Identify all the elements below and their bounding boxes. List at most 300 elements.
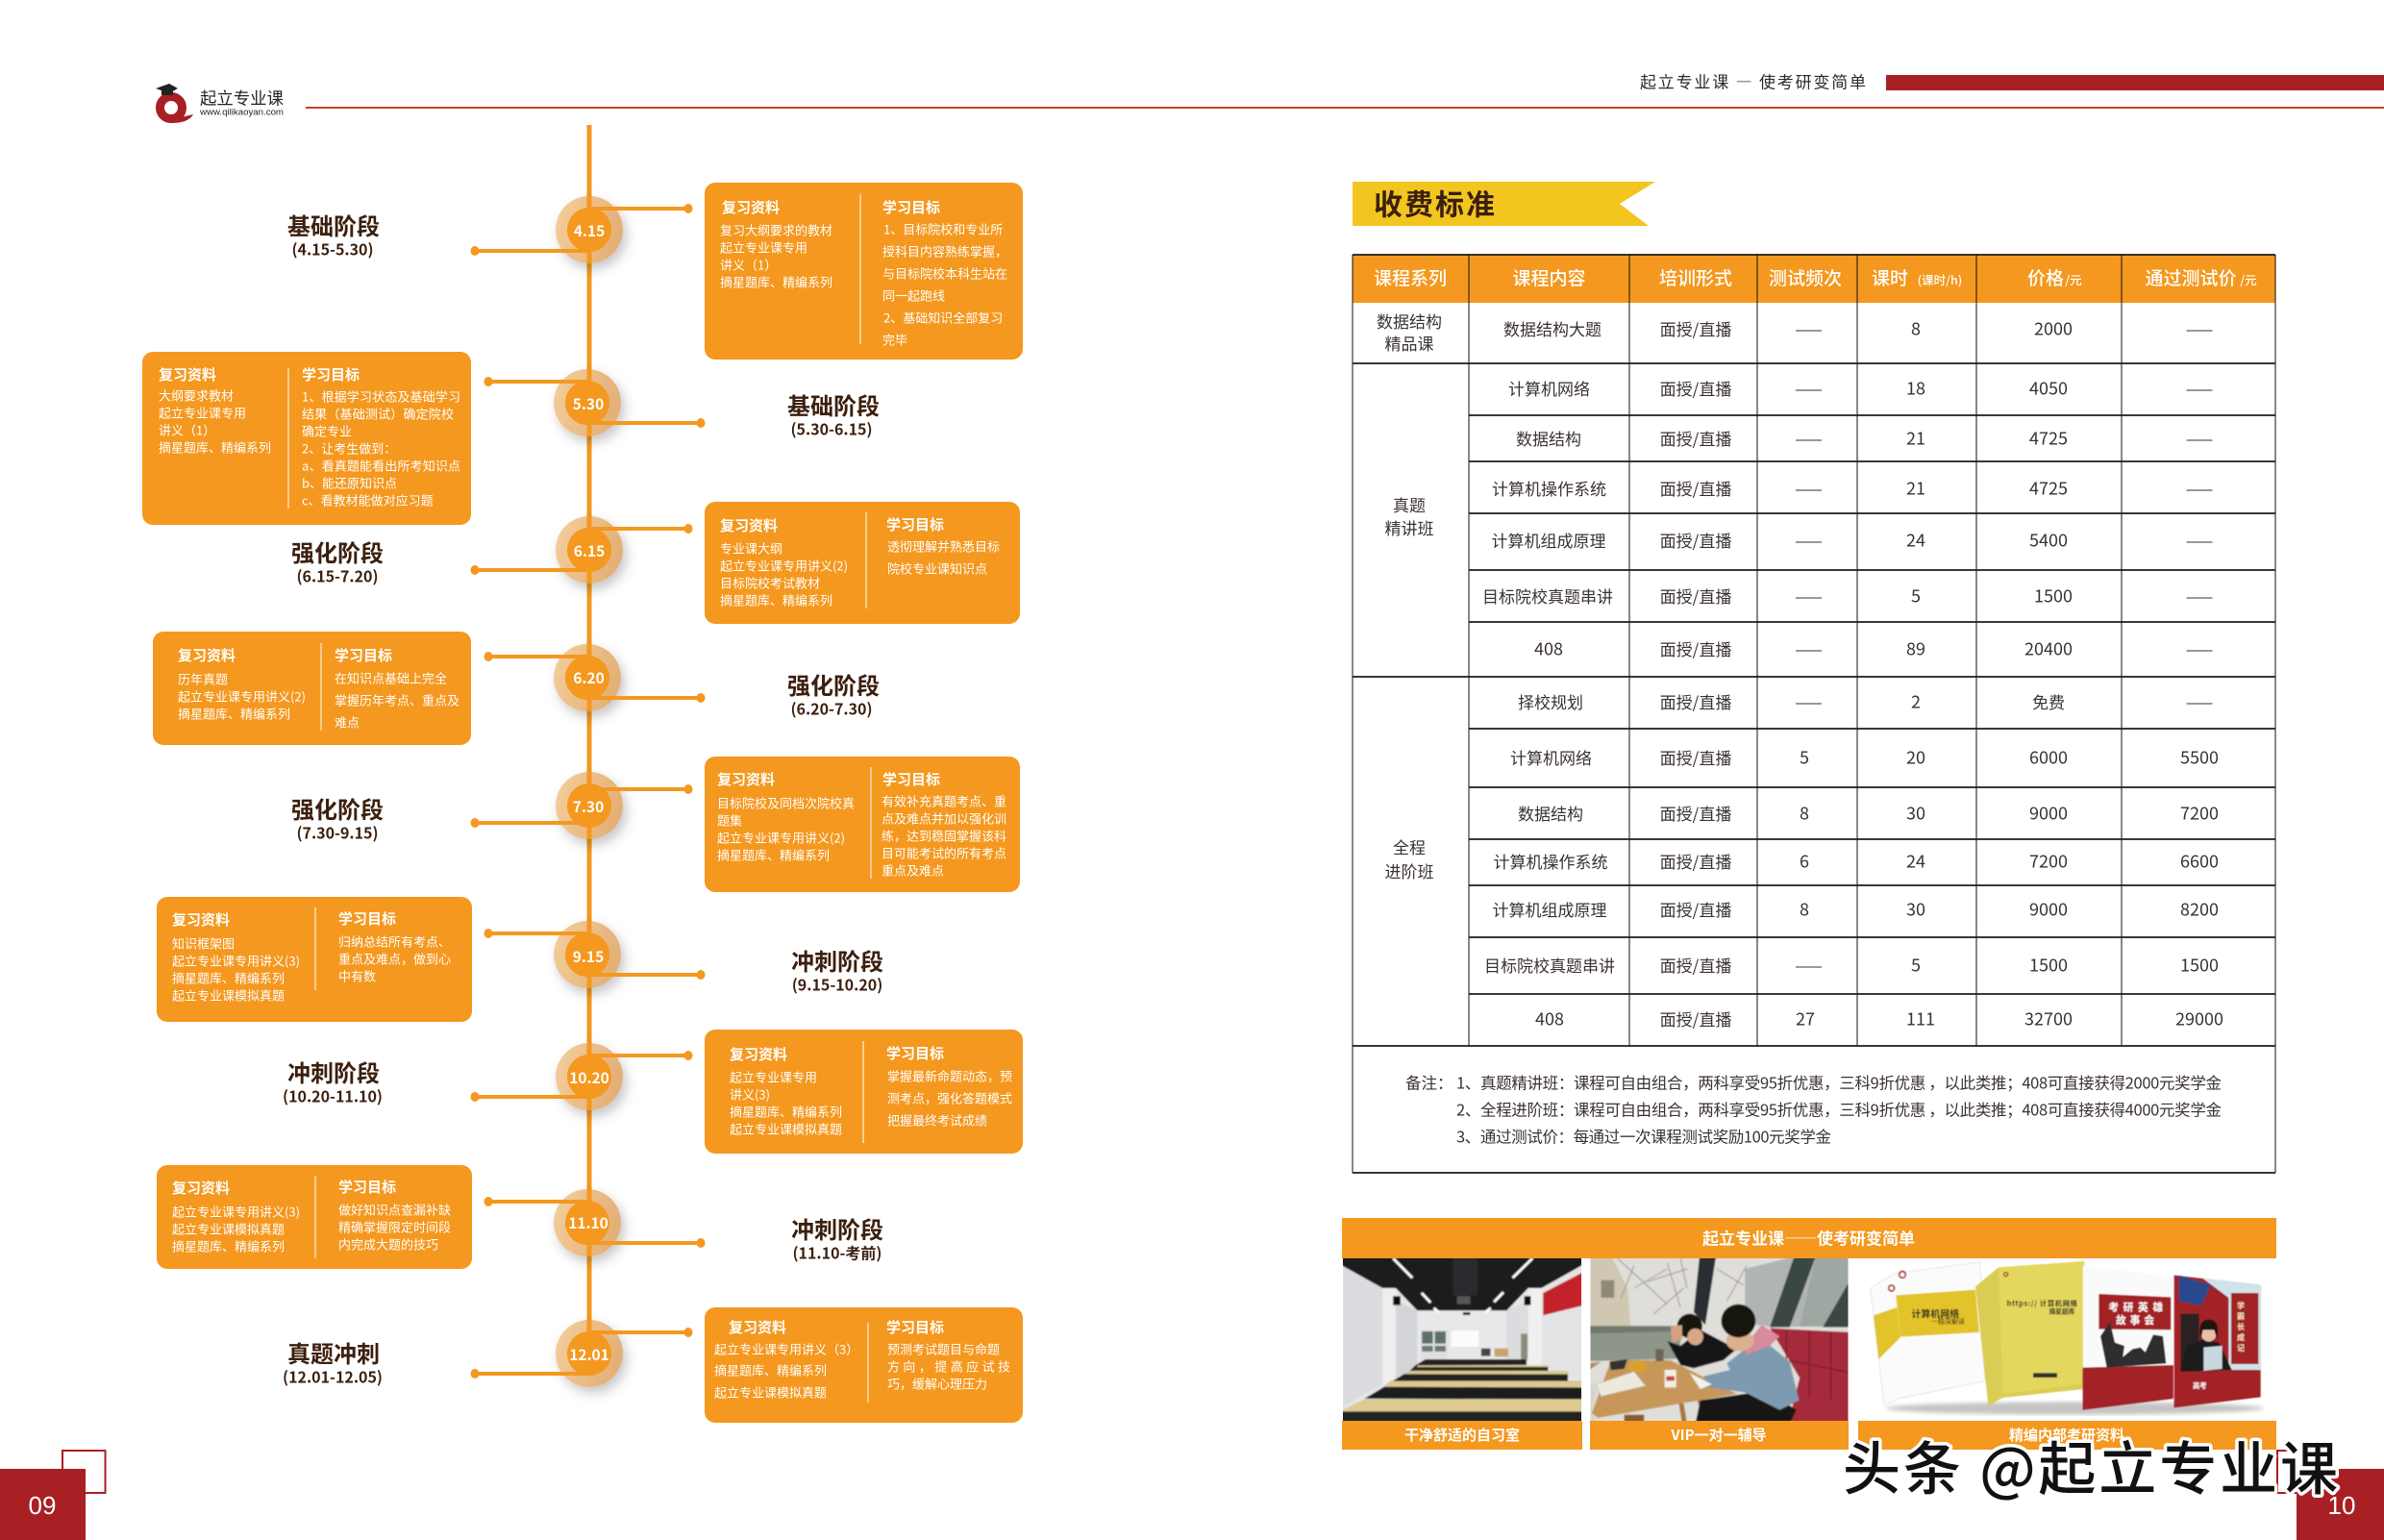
- row 408 full: 27: [1796, 1006, 1815, 1031]
- card 6: 中有数: [338, 967, 376, 984]
- caption: books: [1858, 1421, 2276, 1450]
- row 计算机网络: [1508, 375, 2213, 400]
- stage: 强化阶段 6.20-7.30: 强化阶段: [787, 667, 880, 701]
- card 2: 确定专业: [302, 421, 352, 440]
- series labels: 进阶班: [1384, 858, 1434, 882]
- row 计算机组成原理: ——: [2186, 528, 2213, 552]
- row 408 full: 29000: [2175, 1006, 2223, 1031]
- caption: study room: 干净舒适的自习室: [1404, 1425, 1520, 1445]
- node 12.01: 12.01: [569, 1344, 609, 1365]
- caption: study room: [1342, 1421, 1582, 1450]
- row 数据结构: ——: [1795, 426, 1823, 450]
- book stack: 真题: 摘星题库: [2049, 1305, 2075, 1315]
- row 计算机组成原理 full: 30: [1906, 896, 1925, 921]
- book: 学霸成长记: 长: [2237, 1322, 2245, 1332]
- card 4: 复习资料: [178, 645, 236, 665]
- row 计算机组成原理: 5400: [2029, 527, 2068, 552]
- book: 学霸成长记: 学: [2237, 1301, 2245, 1311]
- card 9: 起立专业课模拟真题: [714, 1382, 827, 1402]
- photo: study room: [1336, 1255, 1584, 1425]
- row 计算机网络 full: 计算机网络: [1510, 745, 1592, 769]
- card 4: 摘星题库、精编系列: [178, 704, 290, 723]
- notes: 2、全程进阶班：课程可自由组合，两科享受95折优惠，三科9折优惠 ，以此类推；408可直接获得4000元奖学金: [1456, 1098, 2223, 1121]
- row 计算机操作系统 full: 计算机操作系统: [1494, 849, 1607, 873]
- card 9: 预测考试题目与命题: [887, 1340, 1000, 1357]
- row 计算机网络 full: [1510, 744, 2219, 769]
- row 数据结构: ——: [2186, 426, 2213, 450]
- book: 学霸成长记: [2174, 1276, 2261, 1407]
- row 数据结构 full: 数据结构: [1518, 801, 1583, 825]
- row 计算机操作系统 full: 面授/直播: [1660, 849, 1731, 873]
- series labels: 真题: [1393, 492, 1426, 516]
- stage: 基础阶段 5.30-6.15: [787, 387, 880, 440]
- stage: 基础阶段 4.15-5.30: [287, 208, 380, 260]
- table header row: [1353, 255, 2275, 303]
- row 408: 20400: [2024, 636, 2073, 661]
- stage: 冲刺阶段 11.10-考前: [791, 1211, 883, 1263]
- table header row: 课程系列: [1374, 264, 1447, 290]
- card 1: 学习目标: [882, 197, 940, 217]
- table header row: 课程内容: [1512, 264, 1586, 290]
- stage: 强化阶段 6.20-7.30: (6.20-7.30): [790, 696, 873, 719]
- card 2: 学习目标: [302, 364, 360, 385]
- card 7: 学习目标: [886, 1043, 944, 1063]
- card 6: 复习资料: [172, 909, 230, 930]
- row 计算机组成原理: 24: [1906, 527, 1925, 552]
- row 择校规划: ——: [2186, 689, 2213, 713]
- node 10.20: 10.20: [569, 1067, 609, 1088]
- card 3: 院校专业课知识点: [887, 559, 987, 577]
- row 408: ——: [2186, 636, 2213, 660]
- book stack: 真题: https:// 计算机网络: [2007, 1298, 2078, 1308]
- row 计算机组成原理: 面授/直播: [1660, 528, 1731, 552]
- row 计算机操作系统: [1492, 475, 2213, 500]
- book: 考研英雄故事会: 考研英雄: [2108, 1300, 2163, 1314]
- card 2: 复习资料: [159, 364, 216, 385]
- row 计算机组成原理 full: 9000: [2029, 896, 2068, 921]
- row 计算机组成原理 full: 计算机组成原理: [1492, 897, 1607, 921]
- book stack: 计算机网络: 计算机网络: [1911, 1305, 1959, 1320]
- row 数据结构大题: 数据结构大题: [1503, 316, 1602, 340]
- header red bar: [1886, 75, 2384, 90]
- stage: 强化阶段 7.30-9.15: [291, 791, 384, 844]
- card 9: 巧，缓解心理压力: [887, 1375, 987, 1392]
- row 数据结构 full: [1518, 800, 2219, 825]
- card 1: 2、基础知识全部复习: [883, 308, 1003, 327]
- card 7: 测考点，强化答题模式: [887, 1088, 1012, 1107]
- row 408: 面授/直播: [1660, 636, 1731, 660]
- card 8: 内完成大题的技巧: [338, 1234, 438, 1254]
- card 1: [705, 183, 1023, 360]
- title banner: 收费标准: [1353, 181, 1655, 226]
- row 408: 89: [1906, 636, 1925, 661]
- node 11.10: [484, 1189, 706, 1256]
- node 5.30: [484, 369, 706, 436]
- node 6.15: 6.15: [574, 540, 605, 561]
- logo: www.qilikaoyan.com: [199, 108, 284, 117]
- card 1: 摘星题库、精编系列: [720, 273, 832, 290]
- row 计算机网络: 18: [1906, 375, 1925, 400]
- card 7: 起立专业课专用: [730, 1067, 817, 1086]
- watermark: 头条 @起立专业课: [1843, 1423, 2338, 1507]
- card 7: 摘星题库、精编系列: [730, 1102, 842, 1121]
- row 目标院校真题串讲: 5: [1911, 583, 1921, 608]
- card 7: 起立专业课模拟真题: [730, 1119, 842, 1138]
- series labels: [1377, 309, 1442, 882]
- row 数据结构: 21: [1906, 425, 1925, 450]
- card 4: 难点: [335, 713, 360, 731]
- card 6: 起立专业课模拟真题: [172, 986, 285, 1004]
- stage: 强化阶段 7.30-9.15: 强化阶段: [291, 791, 384, 825]
- card 9: 摘星题库、精编系列: [714, 1361, 827, 1379]
- row 计算机网络: 4050: [2029, 375, 2068, 400]
- card 4: 在知识点基础上完全: [335, 669, 447, 686]
- card 3: [705, 502, 1020, 624]
- card 6: [157, 897, 472, 1022]
- caption: VIP: VIP一对一辅导: [1670, 1425, 1767, 1445]
- title banner: 收费标准: 收费标准: [1374, 181, 1495, 223]
- row 计算机网络 full: 面授/直播: [1660, 745, 1731, 769]
- card 1: 完毕: [882, 331, 907, 348]
- node 6.15: [471, 516, 692, 584]
- row 目标院校真题串讲 full: 面授/直播: [1660, 953, 1731, 977]
- card 2: 大纲要求教材: [159, 386, 234, 404]
- row 目标院校真题串讲 full: 1500: [2029, 952, 2068, 977]
- card 5: 点及难点并加以强化训: [882, 809, 1006, 827]
- row 数据结构: 数据结构: [1516, 426, 1581, 450]
- row 计算机网络 full: 5: [1800, 744, 1809, 769]
- card 4: 起立专业课专用讲义(2): [178, 686, 306, 706]
- card 4: [153, 632, 471, 745]
- row 目标院校真题串讲 full: 5: [1911, 952, 1921, 977]
- card 6: 起立专业课专用讲义(3): [172, 952, 300, 969]
- card 2: 讲义（1）: [159, 421, 215, 438]
- row 目标院校真题串讲: ——: [2186, 584, 2213, 608]
- stage: 强化阶段 6.15-7.20: 强化阶段: [291, 534, 384, 568]
- row 计算机组成原理 full: 8200: [2180, 896, 2219, 921]
- page number 09: [0, 1451, 106, 1540]
- card 7: 讲义(3): [730, 1084, 770, 1104]
- card 6: 摘星题库、精编系列: [172, 969, 285, 986]
- stage: 强化阶段 6.15-7.20: (6.15-7.20): [296, 563, 379, 586]
- card 2: 起立专业课专用: [159, 404, 246, 421]
- row 数据结构 full: 8: [1800, 800, 1809, 825]
- caption bars: [1342, 1421, 2276, 1450]
- stage: 冲刺阶段 9.15-10.20: (9.15-10.20): [792, 973, 882, 996]
- book: 考研英雄故事会: 故事会: [2116, 1313, 2154, 1328]
- row 数据结构: 面授/直播: [1660, 426, 1731, 450]
- card 5: [705, 757, 1020, 892]
- table header row: 测试频次: [1769, 264, 1842, 290]
- header slogan: 起立专业课 — 使考研变简单: [1640, 69, 1866, 92]
- card 4: 学习目标: [335, 645, 392, 665]
- card 5: 复习资料: [717, 769, 775, 789]
- book: 学霸成长记: 霸: [2237, 1311, 2245, 1322]
- card 9: 起立专业课专用讲义（3）: [714, 1340, 858, 1357]
- row 目标院校真题串讲 full: ——: [1795, 953, 1823, 977]
- node 9.15: 9.15: [573, 946, 604, 967]
- row 408: ——: [1795, 636, 1823, 660]
- row 目标院校真题串讲: 面授/直播: [1660, 584, 1731, 608]
- card 9: 复习资料: [729, 1317, 786, 1337]
- page number 09: 09: [29, 1491, 56, 1520]
- node 7.30: 7.30: [573, 796, 604, 817]
- logo: [156, 84, 284, 123]
- table header row: 价格: [2027, 264, 2064, 290]
- row 择校规划: [1518, 688, 2213, 713]
- row 计算机操作系统: 21: [1906, 475, 1925, 500]
- row 择校规划: 免费: [2032, 689, 2065, 713]
- card 2: [142, 352, 471, 525]
- card 3: 目标院校考试教材: [720, 573, 820, 592]
- row 数据结构 full: 面授/直播: [1660, 801, 1731, 825]
- card 7: [705, 1030, 1023, 1154]
- stage: 冲刺阶段 10.20-11.10: 冲刺阶段: [287, 1055, 380, 1088]
- book stack: 计算机网络: [1871, 1262, 1985, 1406]
- row 数据结构: 4725: [2029, 425, 2068, 450]
- row 计算机操作系统: 计算机操作系统: [1492, 476, 1606, 500]
- card 5: 摘星题库、精编系列: [717, 846, 830, 863]
- row 计算机组成原理: ——: [1795, 528, 1823, 552]
- row 数据结构大题: 面授/直播: [1660, 316, 1731, 340]
- page number 10: [2277, 1451, 2384, 1540]
- card 8: 做好知识点查漏补缺: [338, 1200, 451, 1219]
- card 6: 归纳总结所有考点、: [338, 932, 451, 950]
- row 408 full: 111: [1906, 1006, 1935, 1031]
- card 2: c、看教材能做对应习题: [302, 490, 434, 509]
- card 5: 题集: [717, 811, 742, 829]
- card 2: 1、根据学习状态及基础学习: [302, 386, 460, 406]
- table header row: /元: [2240, 270, 2257, 288]
- page number 10: 10: [2328, 1491, 2355, 1520]
- row 计算机组成原理 full: [1492, 896, 2219, 921]
- card 6: 学习目标: [338, 908, 396, 929]
- card 6: 知识框架图: [172, 934, 235, 952]
- caption: books: 精编内部考研资料: [2009, 1425, 2124, 1445]
- book: 学霸成长记: 成: [2237, 1332, 2245, 1343]
- stage: 冲刺阶段 9.15-10.20: 冲刺阶段: [791, 943, 883, 977]
- row 408: [1534, 636, 2213, 661]
- row 408 full: 面授/直播: [1660, 1006, 1731, 1031]
- series labels: 精讲班: [1384, 515, 1434, 539]
- card 1: 同一起跑线: [882, 286, 945, 304]
- table header row: 通过测试价: [2145, 264, 2237, 290]
- card 1: 1、目标院校和专业所: [883, 219, 1003, 238]
- row 择校规划: 面授/直播: [1660, 689, 1731, 713]
- row 计算机组成原理 full: 8: [1800, 896, 1809, 921]
- card 3: 透彻理解并熟悉目标: [887, 536, 1000, 556]
- card 5: 目标院校及同档次院校真: [717, 794, 855, 811]
- row 计算机操作系统 full: 7200: [2029, 848, 2068, 873]
- photo: VIP tutoring: [1587, 1255, 1851, 1425]
- card 3: 学习目标: [886, 514, 944, 534]
- series labels: 全程: [1393, 834, 1426, 858]
- card 9: 方向，提高应试技: [887, 1357, 1010, 1375]
- node 10.20: [471, 1043, 692, 1110]
- card 1: 与目标院校本科生站在: [882, 263, 1007, 283]
- card 8: 复习资料: [172, 1178, 230, 1198]
- row 数据结构: [1516, 425, 2213, 450]
- row 计算机组成原理: 计算机组成原理: [1492, 528, 1605, 552]
- logo: 起立专业课: [200, 87, 284, 110]
- row 计算机操作系统 full: 6: [1800, 848, 1809, 873]
- card 5: 目可能考试的所有考点: [882, 844, 1006, 861]
- stage: 基础阶段 5.30-6.15: 基础阶段: [787, 387, 880, 421]
- stage: 冲刺阶段 10.20-11.10: (10.20-11.10): [283, 1084, 383, 1107]
- card 2: a、看真题能看出所考知识点: [302, 456, 460, 475]
- card 5: 重点及难点: [882, 861, 944, 879]
- card 8: 摘星题库、精编系列: [172, 1236, 285, 1255]
- row 计算机网络: ——: [2186, 376, 2213, 400]
- row 计算机操作系统 full: [1494, 848, 2219, 873]
- stage: 真题冲刺 12.01-12.05: 真题冲刺: [287, 1335, 380, 1369]
- book: 学霸成长记: 高考: [2193, 1380, 2207, 1391]
- row 计算机网络 full: 5500: [2180, 744, 2219, 769]
- card 3: 摘星题库、精编系列: [720, 590, 832, 609]
- row 目标院校真题串讲: [1482, 583, 2213, 608]
- series labels: 数据结构: [1377, 309, 1442, 333]
- card 2: 结果（基础测试）确定院校: [302, 404, 454, 423]
- row 数据结构大题: ——: [1795, 316, 1823, 340]
- node 6.20: 6.20: [573, 667, 605, 688]
- row 计算机操作系统: ——: [1795, 476, 1823, 500]
- card 7: 复习资料: [730, 1044, 787, 1064]
- card 8: 起立专业课专用讲义(3): [172, 1202, 300, 1221]
- stage: 真题冲刺 12.01-12.05: [283, 1335, 383, 1388]
- row 计算机操作系统: 面授/直播: [1660, 476, 1731, 500]
- book stack: 真题: [1975, 1261, 2084, 1406]
- row 择校规划: ——: [1795, 689, 1823, 713]
- stage: 基础阶段 4.15-5.30: 基础阶段: [287, 208, 380, 241]
- stage: 冲刺阶段 10.20-11.10: [283, 1055, 383, 1107]
- row 408: 408: [1534, 636, 1563, 661]
- stage: 强化阶段 6.15-7.20: [291, 534, 384, 586]
- node 6.20: [484, 644, 706, 711]
- row 计算机操作系统 full: 6600: [2180, 848, 2219, 873]
- table grid: [1353, 255, 2275, 1173]
- card 6: 重点及难点，做到心: [338, 950, 451, 967]
- stage: 真题冲刺 12.01-12.05: (12.01-12.05): [283, 1365, 383, 1388]
- row 计算机操作系统: 4725: [2029, 475, 2068, 500]
- card 5: 学习目标: [882, 769, 940, 789]
- card 1: 讲义（1）: [720, 256, 777, 273]
- row 数据结构大题: [1503, 315, 2213, 340]
- row 目标院校真题串讲 full: [1484, 952, 2219, 977]
- row 计算机操作系统: ——: [2186, 476, 2213, 500]
- card 2: b、能还原知识点: [302, 473, 397, 492]
- row 计算机网络 full: 20: [1906, 744, 1925, 769]
- stage: 冲刺阶段 11.10-考前: 冲刺阶段: [791, 1211, 883, 1245]
- card 8: [157, 1165, 472, 1269]
- row 计算机操作系统 full: 24: [1906, 848, 1925, 873]
- row 计算机网络: 计算机网络: [1508, 376, 1590, 400]
- card 1: 授科目内容熟练掌握，: [882, 242, 1007, 260]
- card 4: 掌握历年考点、重点及: [335, 690, 459, 709]
- stage: 基础阶段 5.30-6.15: (5.30-6.15): [790, 417, 873, 440]
- row 408 full: 32700: [2024, 1006, 2073, 1031]
- row 计算机网络 full: 6000: [2029, 744, 2068, 769]
- card 2: 2、让考生做到：: [302, 438, 396, 458]
- row 数据结构大题: 2000: [2034, 315, 2073, 340]
- timeline spine: [586, 125, 592, 1336]
- row 数据结构 full: 7200: [2180, 800, 2219, 825]
- node 12.01: [471, 1320, 692, 1387]
- header rule: [306, 107, 2384, 109]
- notes: [1405, 1071, 2223, 1148]
- row 择校规划: 2: [1911, 688, 1921, 713]
- stage: 强化阶段 6.20-7.30: [787, 667, 880, 719]
- table header row: /元: [2065, 270, 2082, 288]
- row 数据结构大题: 8: [1911, 315, 1921, 340]
- book stack: 计算机网络: 一精深解读: [1931, 1317, 1965, 1327]
- node 4.15: [471, 196, 692, 263]
- table header row: 培训形式: [1659, 264, 1732, 290]
- card 5: 起立专业课专用讲义(2): [717, 829, 845, 846]
- notes: 3、通过测试价：每通过一次课程测试奖励100元奖学金: [1456, 1125, 1832, 1148]
- card 8: 精确掌握限定时间段: [338, 1217, 451, 1236]
- card 3: 起立专业课专用讲义(2): [720, 556, 848, 575]
- row 数据结构大题: ——: [2186, 316, 2213, 340]
- row 目标院校真题串讲: ——: [1795, 584, 1823, 608]
- book: 考研英雄故事会: [2083, 1266, 2173, 1410]
- photo: books: [1871, 1261, 2264, 1415]
- card 1: 起立专业课专用: [720, 238, 807, 256]
- row 计算机组成原理 full: 面授/直播: [1660, 897, 1731, 921]
- node 4.15: 4.15: [574, 220, 605, 241]
- row 择校规划: 择校规划: [1518, 689, 1583, 713]
- stage: 冲刺阶段 11.10-考前: (11.10-考前): [793, 1240, 882, 1263]
- stage: 基础阶段 4.15-5.30: (4.15-5.30): [291, 236, 374, 260]
- caption: VIP: [1590, 1421, 1849, 1450]
- card 7: 掌握最新命题动态，预: [887, 1067, 1012, 1084]
- fee table: [1353, 255, 2275, 1173]
- table header row: (课时/h): [1918, 270, 1962, 288]
- card 9: [705, 1307, 1023, 1423]
- card 2: 摘星题库、精编系列: [159, 438, 271, 456]
- row 数据结构 full: 9000: [2029, 800, 2068, 825]
- stage: 强化阶段 7.30-9.15: (7.30-9.15): [296, 821, 379, 844]
- row 计算机网络: ——: [1795, 376, 1823, 400]
- card 8: 起立专业课模拟真题: [172, 1219, 285, 1238]
- row 目标院校真题串讲 full: 目标院校真题串讲: [1484, 953, 1615, 977]
- notes: 备注：: [1405, 1071, 1453, 1094]
- series labels: 精品课: [1384, 331, 1434, 355]
- card 4: 历年真题: [178, 669, 228, 688]
- card 3: 复习资料: [720, 515, 778, 535]
- row 目标院校真题串讲: 目标院校真题串讲: [1482, 584, 1613, 608]
- table header row: 课时: [1872, 264, 1908, 290]
- card 5: 练，达到稳固掌握该科: [882, 827, 1006, 844]
- photo banner: 起立专业课——使考研变简单: [1702, 1225, 1915, 1250]
- row 408 full: 408: [1535, 1006, 1564, 1031]
- node 7.30: [471, 772, 692, 839]
- card 1: 复习大纲要求的教材: [720, 221, 832, 238]
- card 3: 专业课大纲: [720, 538, 782, 558]
- stage: 冲刺阶段 9.15-10.20: [791, 943, 883, 996]
- node 9.15: [484, 921, 706, 988]
- photo banner: [1342, 1218, 2276, 1258]
- card 9: 学习目标: [886, 1317, 944, 1337]
- card 8: 学习目标: [338, 1177, 396, 1197]
- row 计算机组成原理: [1492, 527, 2213, 552]
- row 目标院校真题串讲: 1500: [2034, 583, 2073, 608]
- row 408 full: [1535, 1006, 2223, 1031]
- book: 学霸成长记: 记: [2237, 1343, 2245, 1354]
- card 7: 把握最终考试成绩: [887, 1111, 987, 1129]
- row 数据结构 full: 30: [1906, 800, 1925, 825]
- card 1: 复习资料: [722, 197, 780, 217]
- row 目标院校真题串讲 full: 1500: [2180, 952, 2219, 977]
